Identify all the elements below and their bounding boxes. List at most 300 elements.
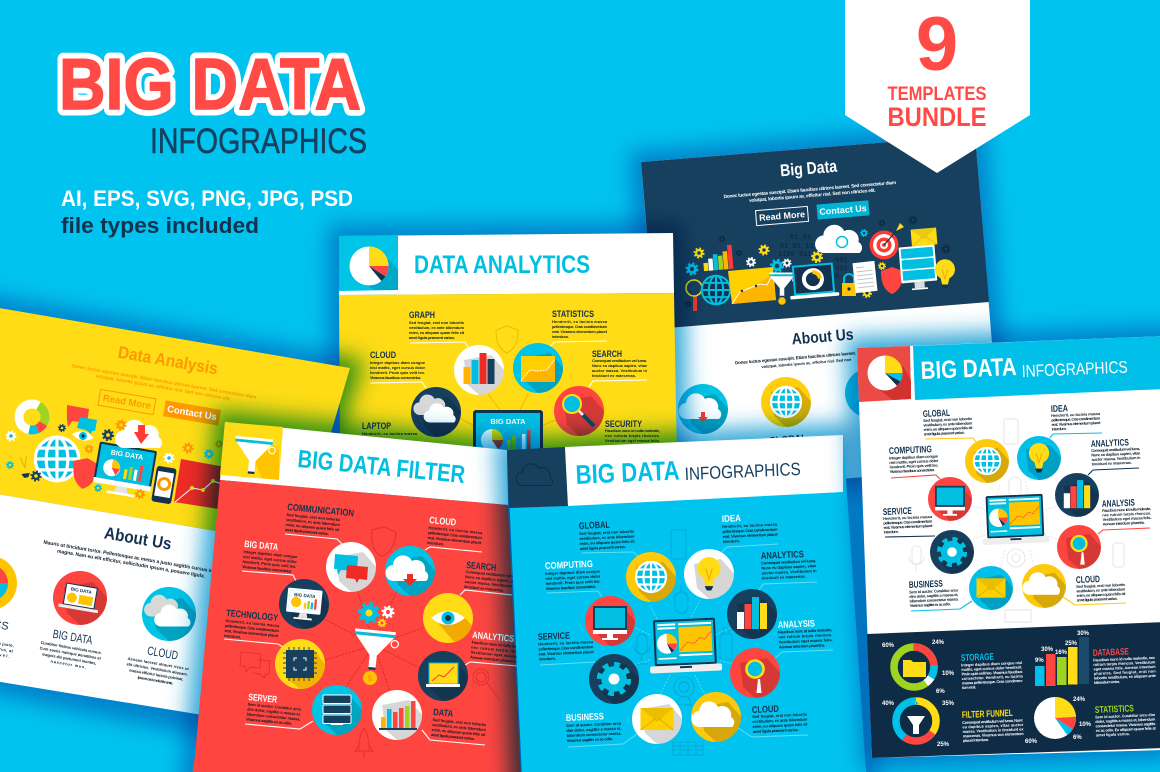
text block: service: SERVICE (883, 506, 912, 518)
text block: big data: nisl mattis, eget cursus dolor (243, 554, 298, 564)
text block: global: Sed feugiat, erat non lobortis (923, 416, 972, 423)
text block: hero intro: Donec luctus egestas suscipit. Etiam faucibus ultrices laoreet. Sed consectetur diam (71, 363, 257, 401)
text block: analytics: Consequat vestibulum vel luma. (1091, 446, 1140, 453)
icon: cloud circle (142, 587, 218, 663)
text block: service: Hendrerit, eu lacinia massa (883, 514, 933, 521)
text block: analytics (1088, 437, 1142, 475)
title: BIG DATA INFOGRAPHICS: BIG DATA (920, 353, 1017, 385)
icon: eye (71, 430, 95, 442)
text block: storage: tum erat. (962, 684, 976, 690)
text block: analytics: ANALYTICS (1091, 437, 1129, 450)
text block: business: dim dolor, sagittis a massa et, (909, 592, 958, 599)
text block: cloud (124, 656, 190, 688)
icons: centre gears (360, 604, 394, 627)
text block: analysis: nec rutrum turpis rhoncus. (1102, 510, 1151, 517)
text block: idea: Hendrerit, eu lacinia massa (1051, 411, 1101, 418)
connector lines (325, 592, 423, 692)
binary digits: 1100 011 (778, 251, 812, 259)
button: Contact Us (816, 200, 870, 220)
text block: search: tincidunt ex maecenas. (464, 584, 504, 593)
text block: service: pellentesque. Cras condimentum (883, 518, 933, 525)
text block: global: vestibulum, ex ante bibendum (923, 420, 973, 427)
text block: about: Donec luctus egestas suscipit. Etiam faucibus ultrices laoreet. Sed (735, 350, 865, 365)
chart: red area (174, 459, 225, 510)
text block: hero intro: Donec luctus egestas suscipit. Etiam faucibus ultrices laoreet. Sed consectetur diam (723, 180, 896, 200)
text block: idea (1050, 402, 1102, 438)
binary digits: 01 01 (790, 234, 811, 242)
title: BIG DATA INFOGRAPHICS (920, 353, 1128, 385)
chart: statistics pie: 10% (1079, 722, 1092, 728)
text block: file types (61, 186, 353, 238)
title: BIG DATA INFOGRAPHICS: INFOGRAPHICS (1021, 358, 1128, 381)
icon: cloud circle (385, 546, 455, 616)
icon: bars circle (727, 589, 797, 659)
text block: about: volutpat, lobortis ipsum ac, efficitur nisl. Sed non (761, 357, 852, 369)
text block: idea: erat. Vivamus elementum placet (723, 532, 778, 539)
text block: server: bibendum consectetur massa. (246, 711, 301, 722)
text block: analytics: ANALYTICS (761, 549, 804, 562)
chart: yellow line chart (728, 267, 776, 304)
text block: search: Consequat vestibulum vel luma. (592, 358, 647, 363)
text block: service (538, 630, 595, 665)
text block: data: enim, eu aliquam quam felis sit (431, 727, 486, 737)
icon: monitor BIG DATA (473, 410, 543, 460)
text block: service: interdum. (539, 656, 556, 661)
badge: 9 templates bundle: TEMPLATES (888, 84, 986, 105)
icon: cloud (115, 420, 162, 448)
text block: cloud: massa efficitur lacinia pulvinar, (129, 667, 184, 682)
text block: idea: IDEA (722, 513, 741, 525)
text block: search: SEARCH (592, 349, 622, 360)
text block: computing: COMPUTING (889, 444, 932, 457)
text block: computing: nisl mattis, eget cursus dolor (889, 458, 939, 465)
text block: big data: hendrerit. Proin quis velit leo. (242, 559, 297, 569)
icons: gears (6, 420, 222, 498)
text block: search: Consequat vestibulum vel l (465, 569, 514, 579)
text block: cloud: CLOUD (752, 704, 779, 716)
text block: laptop: LAPTOP (362, 421, 392, 432)
icon: monitor circle (585, 596, 655, 666)
text block: computing: Integer dapibus diam congue (545, 569, 601, 576)
text block: laptop: Hendrerit, eu lacinia massa (362, 431, 418, 436)
text block: database: Faucibus nunc id nulla molestie, nec (1093, 655, 1156, 662)
icon: arrow down (134, 425, 149, 444)
button: Read More (755, 206, 809, 226)
text block: graph (409, 310, 468, 347)
text block: service: pellentesque. Cras condimentum (538, 644, 594, 651)
text block: search: tincidunt ex maecenas. (592, 373, 636, 378)
text block: graph: vestibulum, ex ante bibendum (409, 325, 465, 330)
text block: global: vestibulum, ex ante bibendum (579, 534, 635, 541)
text block: database: rutrum turpis rhoncus. Vestibulum (1093, 659, 1156, 667)
text block: graph: amet ligula praesent varius. (409, 335, 455, 340)
text block: big data: nascetur mus. (50, 659, 87, 670)
icon: padlock (842, 274, 856, 296)
text block: communication: enim, eu aliquam quam felis sit (285, 522, 340, 532)
text block: technology (224, 608, 283, 647)
text block: global (579, 519, 638, 556)
icon: cloud (815, 225, 862, 253)
text block: cloud: elit ultricies. Vestibulum aliquam, (126, 661, 188, 677)
text block: analytics: Vestibulum eget massa (470, 649, 518, 659)
text block: cloud: Hendrerit, eu lacinia massa (428, 525, 483, 535)
text block: business: Sem id auctor. Curabitur arcu (566, 721, 622, 728)
heading: About Us: About Us (791, 326, 854, 349)
icon: monitor circle (279, 579, 349, 649)
text block: hero intro: volutpat, lobortis ipsum ac, efficitur nisl. Sed non ultricies elit. (749, 188, 876, 204)
text block: filter funnel: Consequat vestibulum vel luma. Nunc (962, 717, 1024, 725)
icon: funnel block (220, 422, 283, 480)
text block: search (589, 349, 648, 387)
text block: statistics: consectetur massa. Vivamus sagittis (1095, 721, 1156, 728)
text block: analysis (1098, 497, 1152, 534)
icon: cloud circle (411, 387, 481, 457)
icon: line chart circle (513, 343, 583, 413)
text block: database: DATABASE (1093, 646, 1129, 659)
text block: service: erat. Vivamus elementum placet (883, 523, 933, 530)
icon: desktop BIG DATA (92, 441, 157, 500)
text block: storage: Proin quis velit leo. Vivamus faucibus (961, 669, 1023, 676)
text block: idea: erat. Vivamus elementum placet (1051, 420, 1101, 427)
chart: filter funnel donut: 35% (942, 701, 955, 707)
icon: globe circle (965, 439, 1027, 501)
heading: Big Data: Big Data (779, 157, 838, 180)
text block: analysis: ANALYSIS (778, 618, 815, 631)
text block: filter funnel: FILTER FUNNEL (962, 708, 1013, 721)
text block: statistics: Hendrerit, eu lacinia massa (552, 319, 608, 324)
text block: global: Sed feugiat, erat non lobortis (579, 529, 634, 536)
icons: gears (685, 216, 950, 307)
badge: 9 templates bundle: 9 (916, 2, 958, 87)
chart: database bars: 30% (1077, 631, 1090, 637)
icon: donut chart (14, 399, 50, 435)
text block: search: Nunc eu dapibus sapien, vitae (592, 363, 648, 368)
chart: storage donut: 24% (932, 640, 945, 646)
text block: cloud (425, 515, 484, 552)
text block: data: vestibulum, ex ante bibendum (432, 722, 487, 732)
text block: big data: Vivamus faucibus consectetur. (242, 564, 292, 574)
text block: technology: erat. Vivamus elementum placet (224, 628, 279, 638)
button: Read More (98, 389, 156, 415)
icon: laptop with donut (788, 262, 839, 300)
panel: Data Analytics (339, 233, 677, 462)
text block: idea: IDEA (1051, 403, 1068, 415)
text block: big data (242, 539, 299, 581)
text block: technology: pellentesque. Cras condimentum (225, 623, 280, 633)
chart: small bars (702, 245, 733, 271)
text block: data: DATA (433, 707, 454, 720)
text block: analysis: Vestibulum eget massa felis. (779, 637, 833, 644)
text block: global: amet ligula praesent varius. (924, 430, 965, 436)
binary digits (778, 234, 848, 281)
panel: dark Big Data web page (641, 135, 1002, 493)
text block: analytics (759, 549, 818, 590)
text block: cloud: Integer dapibus diam congue (370, 360, 426, 365)
icon: globe circle (761, 377, 831, 447)
title: BIG DATA FILTER: BIG DATA FILTER (296, 445, 466, 489)
icon: globe circle (626, 552, 696, 622)
text block: cloud: Vivamus faucibus consectetur. (370, 375, 421, 380)
text block: security (605, 419, 660, 443)
text block: cloud (738, 703, 809, 737)
text block: business: bibendum consectetur massa. (567, 731, 622, 738)
text block: storage: mattis, eget cursus dolor hendrerit. (961, 664, 1022, 672)
text block: communication: amet ligula praesent varius. (285, 527, 329, 536)
text block: laptop (362, 421, 418, 436)
text block: analytics: nec rutrum turpis rho (471, 644, 518, 654)
footer band (867, 622, 1160, 758)
icon: centre laptop (981, 494, 1049, 545)
text block: service: interdum. (884, 529, 899, 534)
text block: cloud: vestibulum, ex ante bibendum (752, 717, 808, 724)
text block: global (923, 407, 976, 442)
text block: statistics: ex ac odio. Ex aliquam quam felis at (1096, 725, 1156, 733)
text block: analysis: Vestibulum eget massa felis. (1102, 515, 1152, 522)
text block: database: lobortis vestibulum, ex aliquam ante (1094, 673, 1157, 680)
panel: red Big Data Filter (190, 422, 522, 772)
text block: statistics: interdum. (552, 334, 569, 339)
icon: shield (70, 456, 100, 491)
heading: About Us: About Us (103, 523, 173, 554)
icon: monitor circle (928, 477, 990, 539)
binary digits: 011 (835, 265, 848, 273)
icon: monitor circle: BIG DATA (294, 592, 316, 599)
title: DATA ANALYTICS: DATA ANALYTICS (414, 251, 590, 279)
text block: analysis: Faucibus nunc id nulla molestie, (1102, 506, 1151, 513)
chart: database bars: 16% (1055, 650, 1068, 656)
text block: cloud: vestibulum, ex ante bibendum (1076, 586, 1126, 593)
text block: cloud: ipsum orci molestie ante. (137, 675, 174, 686)
text block: cloud: pellentesque. Cras condimentum (428, 530, 483, 540)
text block: filter funnel: eu dapibus sapien, vitae auctor (962, 722, 1024, 729)
text block: service: erat. Vivamus elementum placet (539, 649, 594, 656)
icon: bulb (11, 444, 37, 479)
icon: gear circle (930, 530, 992, 592)
text block: storage (961, 650, 1024, 690)
icon: navy cloud block (507, 447, 568, 508)
text block: storage: Integer dapibus diam congue nisl (961, 660, 1022, 667)
text block: business: BUSINESS (909, 579, 943, 591)
text block: statistics: STATISTICS (552, 309, 594, 320)
text block: analytics (0, 638, 15, 659)
text block: statistics: Sem id auctor. Curabitur arcu dim (1095, 712, 1156, 719)
icon: bars circle (454, 345, 524, 415)
text block: computing: nisl mattis, eget cursus dolor (545, 574, 601, 581)
text block: business: BUSINESS (566, 711, 604, 724)
panel: yellow Data Analysis web page (0, 303, 350, 730)
title: BIG DATA: BIG DATA (59, 45, 361, 125)
text block: business: Vivamus sagittis ex ac odio. (567, 736, 613, 743)
chart: storage donut: 60% (882, 643, 895, 649)
text block: server: Sem id auctor. Curabitur arcu (247, 701, 302, 712)
icon: bulb (935, 259, 955, 288)
text block: database: eget massa felis. Aenean interdum (1093, 664, 1156, 671)
text block: analysis: nec rutrum turpis rhoncus. (778, 632, 832, 639)
text block: business: bibendum consectetur massa. (909, 596, 959, 603)
button: Contact Us: Contact Us (819, 203, 867, 217)
text block: computing (889, 444, 940, 479)
text block: statistics (1095, 702, 1157, 737)
text block: big data: magnis dis parturient montes, (42, 651, 97, 666)
chart: storage donut (882, 640, 955, 695)
text block: file types: file types included (61, 213, 259, 238)
icon: target (870, 223, 904, 260)
icon: big data laptop circle: BIG DATA (70, 586, 93, 595)
text block: search: Nunc eu dapibus sapien, v (465, 574, 514, 584)
text block: cloud: enim, eu aliquam quam felis sit (1076, 591, 1126, 598)
text block: graph: GRAPH (409, 310, 435, 321)
text block: big data: BIG DATA (244, 539, 279, 553)
text block: about: Mauris ut tincidunt tortor. Pellentesque ac metus a justo sagittis cursus in (43, 540, 213, 574)
text block: server (245, 692, 313, 729)
text block: cloud: nisl mattis, eget cursus dolor (370, 365, 425, 370)
icon: pie block (857, 346, 911, 402)
text block: security: nec rutrum turpis rhoncus. (605, 433, 660, 438)
text block: search (460, 560, 515, 595)
icon: eye circle (423, 593, 473, 643)
text block: business (566, 711, 637, 747)
text block: filter funnel: placet interdum. (963, 737, 989, 743)
icon: bars circle (372, 690, 442, 760)
text block: hero intro: volutpat, lobortis ipsum ac, efficitur nisl. Sed non ultricies elit. (95, 373, 231, 402)
text block: big data: Integer dapibus diam congue (243, 549, 298, 559)
text block: communication: vestibulum, ex ante bibendum (286, 517, 341, 527)
text block: cloud: amet ligula praesent varius. (753, 727, 799, 734)
text block: global: enim, eu aliquam quam felis sit (923, 425, 973, 432)
icon: globe (702, 276, 730, 304)
text block: statistics: erat. Vivamus elementum placet (552, 329, 608, 334)
text block: technology: TECHNOLOGY (226, 608, 279, 624)
text block: global: GLOBAL (579, 520, 610, 532)
button: Read More: Read More (759, 209, 805, 223)
text block: computing: Integer dapibus diam congue (889, 453, 939, 460)
icon: cloud circle (1022, 564, 1084, 626)
label: big data: BIG DATA (52, 627, 94, 647)
chart: statistics pie (1025, 697, 1092, 745)
icon: laptop circle (418, 651, 488, 721)
text block: security: SECURITY (605, 419, 643, 430)
chart: statistics pie: 24% (1073, 697, 1086, 703)
text block: analysis (775, 618, 833, 658)
text block: database (1093, 645, 1157, 685)
binary digits: 01 01 11 (780, 243, 814, 251)
text block: computing: Vivamus faucibus consectetur. (890, 467, 935, 474)
text block: business: dim dolor, sagittis a massa et, (566, 726, 621, 733)
text block: filter funnel: massa. Vestibulum in tincidunt ex (962, 726, 1024, 734)
text block: filter funnel: maecenas. Vivamus von elementum (963, 731, 1024, 738)
chart: database bars: 9% (1035, 658, 1044, 664)
text block: graph: Sed feugiat, erat non lobortis (409, 320, 464, 325)
text block: storage: massa pellentesque. Cras condimen- (962, 678, 1024, 685)
text block: analytics: Faucibus nunc id nulla ins (471, 639, 518, 649)
icon: gear circle (589, 654, 659, 724)
icon: bulb circle (1017, 436, 1079, 498)
icon: coin (363, 671, 377, 685)
text block: service: Hendrerit, eu lacinia massa (538, 639, 594, 646)
header band (913, 336, 1160, 400)
icon: coin: $ (368, 674, 373, 683)
text block: communication: COMMUNICATION (287, 502, 355, 519)
chart: storage donut: 6% (936, 689, 945, 695)
text block: idea: pellentesque. Cras condimentum (1051, 415, 1101, 422)
text block: about: magna. Nam eu elit efficitur, sollicitudin ipsum a, posuere ligula. (57, 549, 206, 580)
text block: global: amet ligula praesent varius. (580, 544, 626, 551)
icon: pie block (339, 235, 398, 291)
text block: business: Vivamus sagittis ex ac odio. (910, 601, 951, 608)
text block: analytics: tincidunt ex maecenas. (1092, 460, 1132, 466)
subtitle: INFOGRAPHICS: INFOGRAPHICS (150, 122, 367, 161)
title: BIG DATA INFOGRAPHICS (575, 455, 801, 490)
button: Contact Us (163, 400, 221, 426)
icon: search circle (554, 386, 624, 456)
text block: technology: Hendrerit, eu lacinia massa (225, 618, 280, 628)
text block: business: Sem id auctor. Curabitur arcu (909, 587, 959, 594)
text block: statistics (550, 309, 608, 347)
chart: database bars: 25% (1065, 641, 1078, 647)
text block: big data: Curabitur finibus vehicula cursus. (40, 640, 102, 655)
chart: statistics pie: 60% (1025, 739, 1038, 745)
text block: filter funnel (962, 707, 1025, 743)
chart: filter funnel donut: 25% (937, 742, 950, 748)
button: Contact Us: Contact Us (166, 404, 218, 423)
text block: storage: consectetur. Hendrerit, eu lacinia (962, 673, 1024, 681)
text block: cloud: Aenean laoreet aliquet risus ut (127, 656, 190, 671)
text block: cloud: erat. Vivamus elementum placet (427, 535, 482, 545)
text block: search: auctor massa. Vestibulum (464, 579, 513, 589)
text block: analysis: ANALYSIS (1102, 498, 1135, 510)
text block: analytics: auctor massa. Vestibulum in (1091, 455, 1141, 462)
text block: data: amet ligula praesent varius. (431, 732, 475, 741)
text block: cloud: enim, eu aliquam quam felis sit (752, 722, 808, 729)
text block: computing: Vivamus faucibus consectetur. (546, 584, 596, 591)
text block: analytics: ANALYTICS (472, 630, 515, 645)
icon: analytics circle (0, 556, 17, 610)
text block: analytics: tincidunt ex maecenas. (762, 574, 806, 580)
text block: cloud: CLOUD (429, 515, 457, 529)
title: BIG DATA INFOGRAPHICS: INFOGRAPHICS (684, 459, 801, 484)
text block: computing: hendrerit. Proin quis velit leo. (546, 579, 601, 586)
connector lines (630, 600, 735, 695)
icon: partly hidden circle (845, 368, 895, 418)
icon: globe (35, 437, 79, 481)
text block: big data: Cum sociis natoque penatibus et (39, 645, 102, 661)
text block: service (883, 505, 935, 537)
chart: statistics pie: 6% (1073, 735, 1082, 741)
text block: search: SEARCH (466, 560, 497, 574)
text block: technology: interdum. (224, 633, 241, 640)
panel: white Big Data Infographics (857, 336, 1160, 758)
text block: analytics: Nunc eu dapibus sapien, vitae (761, 563, 817, 570)
text block: analytics (465, 630, 519, 666)
text block: idea: pellentesque. Cras condimentum (722, 527, 778, 534)
icon: envelope circle (969, 566, 1031, 628)
icon: chip circle (275, 639, 325, 689)
panel: blue Big Data Infographics (507, 435, 868, 772)
text block: business (909, 578, 972, 611)
badge: 9 templates bundle (845, 0, 1030, 173)
text block: server: dim dolor, sagittis a massa et, (247, 706, 301, 717)
icon: phone (151, 466, 177, 504)
chart: filter funnel donut (882, 701, 955, 748)
text block: server: Vivamus sagittis ex ac odio. (246, 716, 292, 726)
chart: storage donut: 10% (942, 671, 955, 677)
icon: red shield (881, 267, 903, 294)
icon outlines (634, 530, 732, 755)
icon: chat circle (326, 542, 396, 612)
text block: analysis: Aenean interdum pharetra. (779, 642, 825, 649)
text block: global: enim, eu aliquam quam felis sit (580, 539, 635, 546)
heading: Data Analysis: Data Analysis (117, 343, 219, 378)
